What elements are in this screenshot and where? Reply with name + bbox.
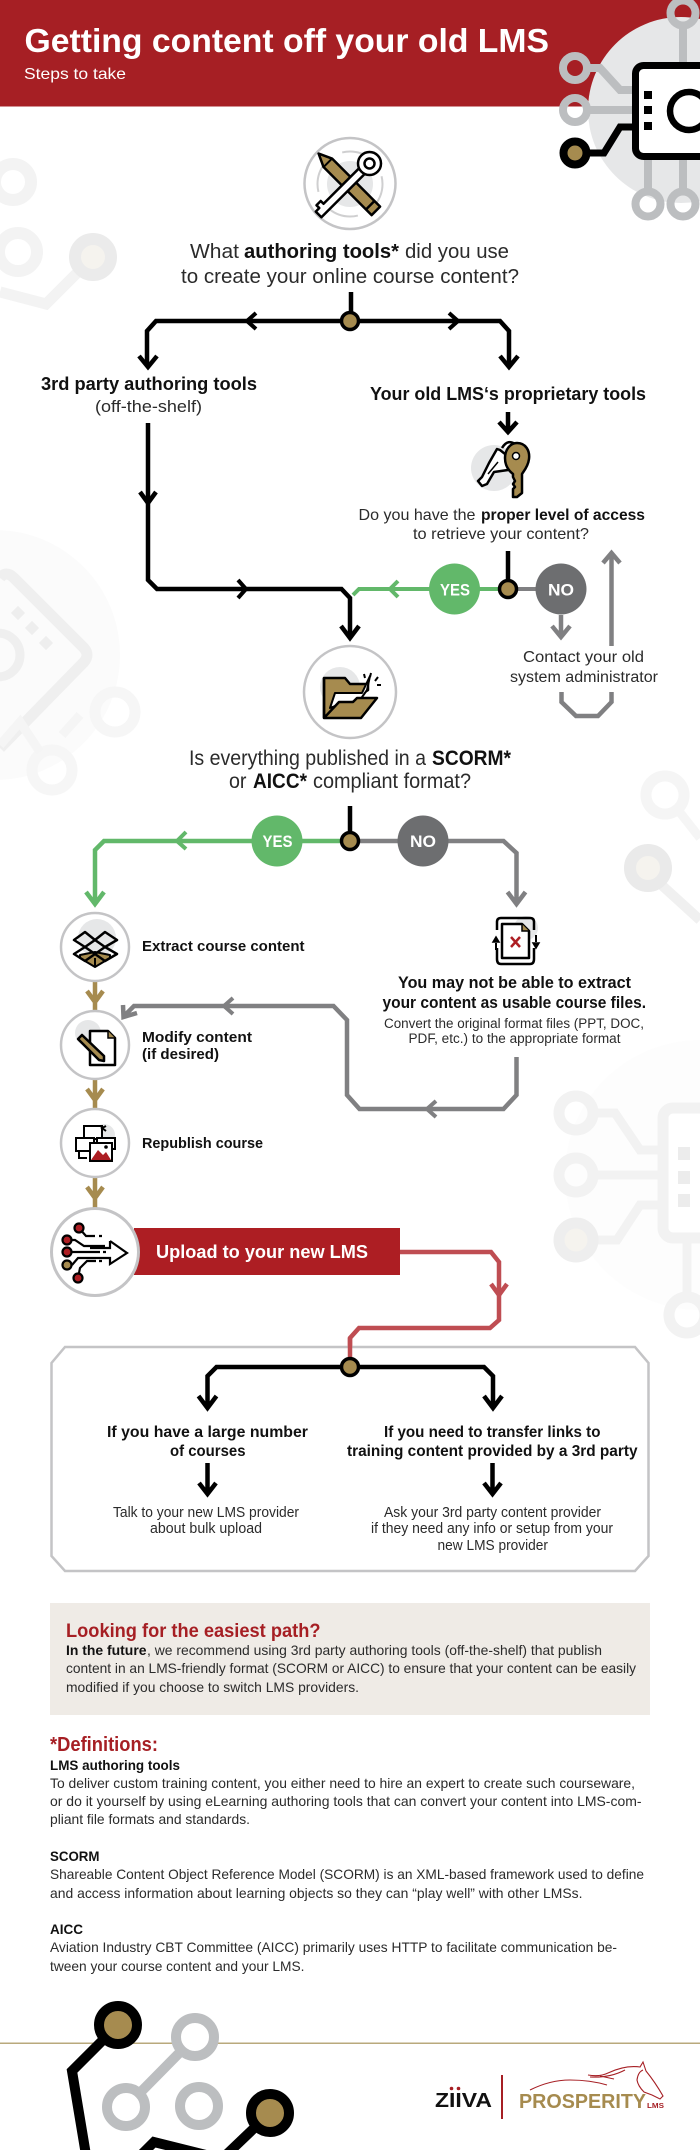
background watermark: circuit right — [630, 776, 700, 920]
question: authoring tools — [181, 240, 519, 288]
question: level of access: Do you have the — [358, 507, 476, 524]
panel: easiest path callout — [50, 1603, 650, 1715]
banner: upload to your new LMS: Upload to your new LMS — [156, 1241, 368, 1262]
callout body: , we recommend using 3rd party authoring tools (off-the-shelf) that publish — [147, 1642, 602, 1658]
option: large number of courses: If you have a large number — [107, 1424, 308, 1441]
flow: authoring tools split — [139, 292, 518, 367]
option: transfer links: if they need any info or setup from your — [371, 1521, 613, 1537]
flow: options split — [198, 1338, 502, 1408]
text: 3rd party authoring tools: 3rd party authoring tools — [41, 374, 257, 394]
question: level of access: proper level of access — [481, 507, 645, 524]
option: transfer links: If you need to transfer links to — [384, 1424, 600, 1441]
yes badge: YES — [440, 580, 470, 600]
text: may not be able to extract: your content as usable course files. — [382, 994, 646, 1012]
definition: SCORM — [50, 1848, 644, 1901]
question: level of access — [358, 507, 645, 543]
flow: contact administrator loop — [552, 553, 620, 716]
logo: prosperity LMS: PROSPERITY — [519, 2091, 647, 2113]
background watermark: chip left — [0, 530, 135, 790]
option: transfer links: training content provided by a 3rd party — [347, 1443, 638, 1460]
text: may not be able to extract: Convert the original format files (PPT, DOC, — [384, 1016, 644, 1031]
option: large number of courses: Talk to your new LMS provider — [113, 1505, 299, 1521]
background watermark: chip lower right — [559, 1040, 700, 1333]
text: republish course: Republish course — [142, 1136, 263, 1152]
question: authoring tools: authoring tools* — [244, 240, 399, 263]
text: contact administrator: system administrator — [510, 669, 658, 686]
no badge: NO — [410, 832, 436, 851]
definition: LMS authoring tools: pliant file formats and standards. — [50, 1811, 250, 1827]
definition: LMS authoring tools: or do it yourself by using eLearning authoring tools that can convert your content into LMS-com- — [50, 1793, 642, 1809]
question: compliant format: or — [229, 770, 246, 793]
callout body — [66, 1642, 636, 1695]
callout heading: Looking for the easiest path? — [66, 1621, 320, 1642]
text: may not be able to extract — [382, 974, 646, 1046]
text: 3rd party authoring tools: (off-the-shelf) — [95, 397, 202, 416]
text: contact administrator: Contact your old — [523, 649, 644, 666]
flow: third party path to folder — [140, 423, 359, 638]
banner: upload to your new LMS — [134, 1228, 400, 1275]
callout body: content in an LMS-friendly format (SCORM or AICC) to ensure that your content can be easily — [66, 1660, 636, 1676]
definition: LMS authoring tools: To deliver custom training content, you either need to hire an expert to create such courseware, — [50, 1775, 635, 1791]
no badge: NO — [548, 580, 574, 600]
text: modify content: Modify content — [142, 1030, 252, 1046]
definition: SCORM: and access information about learning objects so they can “play well” with other LMSs. — [50, 1885, 582, 1901]
no badge — [536, 564, 586, 614]
option: large number of courses: about bulk upload — [150, 1521, 262, 1537]
icon: horse — [530, 2062, 663, 2099]
definition: SCORM: Shareable Content Object Reference Model (SCORM) is an XML-based framework used to define — [50, 1866, 644, 1882]
flow: compliant yes or no — [86, 806, 526, 904]
footer divider line — [0, 2042, 700, 2044]
question: authoring tools: What — [190, 240, 239, 263]
icon: keys — [471, 442, 529, 497]
question: compliant format: Is everything published in a — [189, 747, 426, 770]
definition: SCORM: SCORM — [50, 1848, 100, 1864]
arrow: to keys — [499, 412, 517, 432]
question: compliant format: SCORM* — [432, 747, 512, 770]
question: authoring tools: to create your online course content? — [181, 265, 519, 288]
option: large number of courses: of courses — [170, 1443, 246, 1460]
option: transfer links — [347, 1424, 638, 1554]
question: compliant format: compliant format? — [313, 770, 471, 793]
icon: modify document — [61, 1011, 129, 1079]
flow: return path to modify content — [123, 998, 516, 1117]
definition: AICC: tween your course content and your LMS. — [50, 1958, 304, 1974]
definitions heading: *Definitions: — [50, 1734, 158, 1756]
flow: gold connectors — [87, 981, 103, 1208]
definition: AICC: AICC — [50, 1921, 83, 1937]
flow: access yes or no — [353, 551, 586, 614]
text: may not be able to extract: You may not be able to extract — [398, 974, 631, 992]
question: compliant format — [189, 747, 512, 793]
logo: prosperity LMS: LMS — [647, 2101, 664, 2110]
text: modify content: (if desired) — [142, 1047, 219, 1063]
subtitle: Steps to take — [24, 66, 126, 83]
text: contact administrator — [510, 649, 658, 686]
yes badge: YES — [262, 832, 292, 851]
icon: file with cross — [493, 916, 539, 964]
yes badge — [429, 564, 480, 614]
logo: ziiva: ZIIVA — [435, 2090, 492, 2112]
logo divider — [501, 2075, 503, 2119]
question: authoring tools: did you use — [405, 240, 509, 263]
text: extract course content: Extract course content — [142, 939, 305, 955]
yes badge — [252, 816, 302, 866]
icon: republish — [61, 1109, 129, 1177]
option: transfer links: new LMS provider — [438, 1538, 548, 1554]
background watermark: circuit top left — [0, 164, 111, 304]
icon: upload circuit — [52, 1208, 138, 1296]
text: modify content — [142, 1030, 252, 1063]
panel: new LMS options — [52, 1338, 648, 1571]
no badge — [398, 816, 448, 866]
definition: AICC — [50, 1921, 617, 1974]
option: large number of courses — [107, 1424, 308, 1537]
definition: LMS authoring tools: LMS authoring tools — [50, 1757, 180, 1773]
text: may not be able to extract: PDF, etc.) to the appropriate format — [408, 1031, 621, 1046]
definition: AICC: Aviation Industry CBT Committee (AICC) primarily uses HTTP to facilitate communication be- — [50, 1939, 617, 1955]
text: proprietary tools: Your old LMS‘s proprietary tools — [370, 384, 646, 404]
icon: footer circuit — [72, 2006, 289, 2150]
logo: prosperity LMS — [519, 2062, 664, 2113]
icon: folder — [304, 646, 396, 738]
definition: LMS authoring tools — [50, 1757, 642, 1827]
text: 3rd party authoring tools — [41, 374, 257, 416]
icon: open box — [61, 913, 129, 981]
panel: definitions — [50, 1734, 644, 1974]
title: Getting content off your old LMS — [24, 22, 549, 59]
icon: circuit chip top right — [563, 0, 700, 216]
question: compliant format: AICC* — [253, 770, 308, 793]
icon: tools — [304, 138, 396, 229]
header banner — [0, 0, 700, 106]
question: level of access: to retrieve your content? — [413, 526, 589, 543]
callout body: modified if you choose to switch LMS providers. — [66, 1679, 359, 1695]
flow: red connector — [350, 1252, 507, 1360]
callout body: In the future — [66, 1642, 147, 1658]
option: transfer links: Ask your 3rd party content provider — [384, 1505, 601, 1521]
